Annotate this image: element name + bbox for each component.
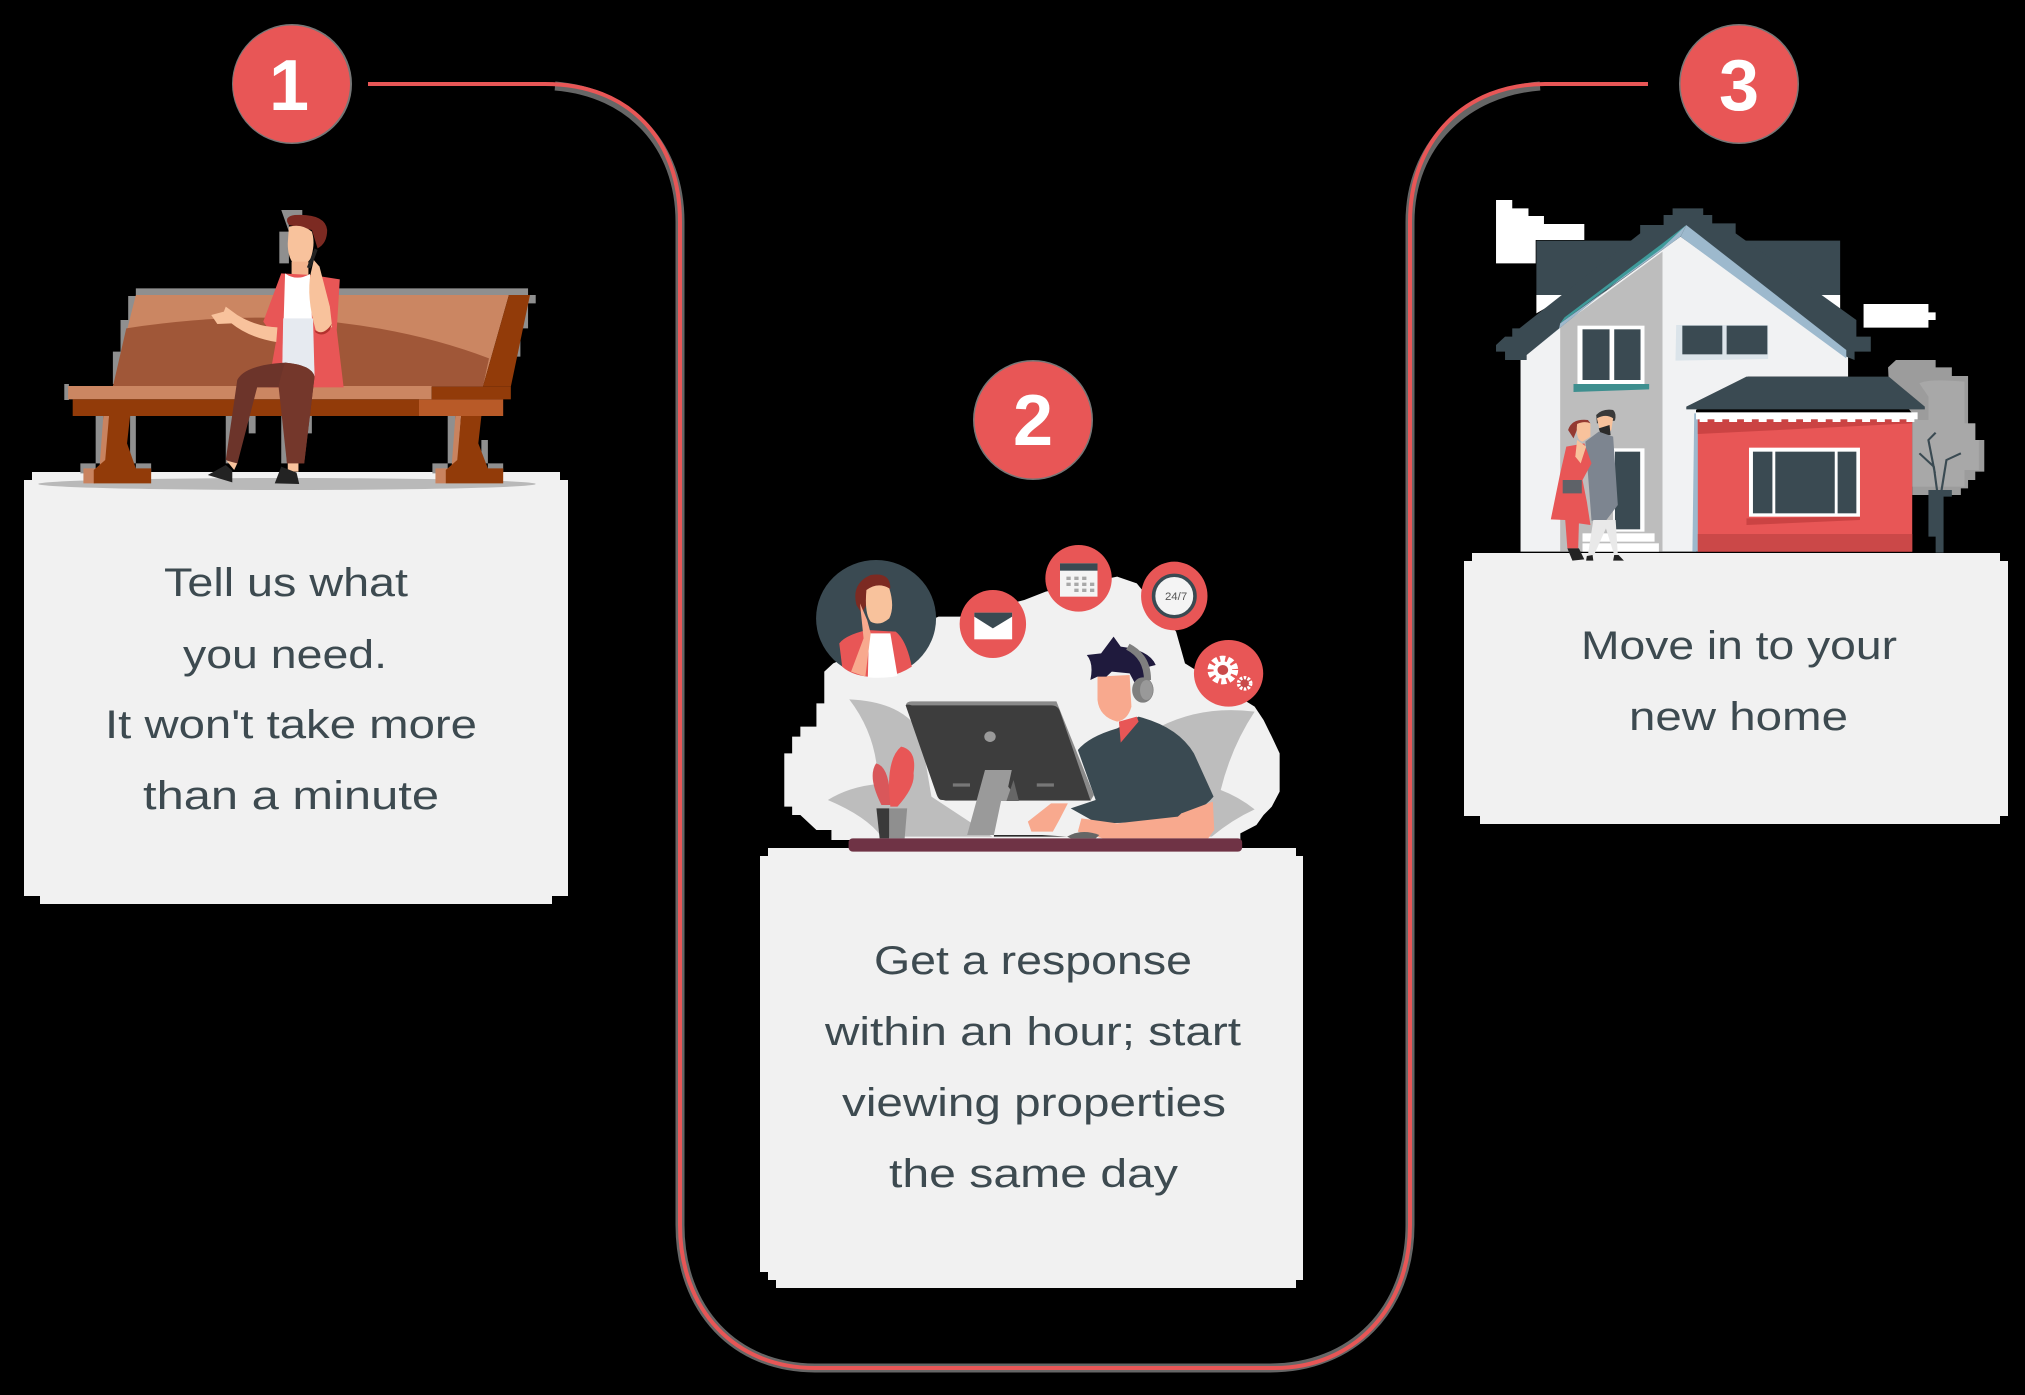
cloud background (784, 577, 1280, 840)
panel: step 3 card (1464, 553, 2008, 824)
step 3 text (1581, 624, 1897, 739)
house walls (1521, 237, 1848, 552)
clouds (1496, 200, 1584, 263)
step 1 number badge (232, 24, 352, 144)
bench legs (83, 416, 109, 483)
main roof (1496, 208, 1871, 360)
leaves background (828, 699, 992, 837)
upper windows (1574, 325, 1768, 392)
bench back (113, 295, 509, 387)
tree trunk (1919, 433, 1961, 553)
door and steps (1583, 448, 1659, 552)
step 2 text (824, 939, 1241, 1196)
step 3 number badge: 3 (1719, 46, 1759, 126)
grey halo behind bench (64, 210, 536, 473)
floor shadow (38, 478, 536, 490)
desk (849, 838, 1242, 852)
step 3 text: Move in to your (1581, 624, 1897, 668)
step 2 text: viewing properties (842, 1081, 1226, 1125)
panel: step 2 card (760, 848, 1303, 1288)
step 2 text: within an hour; start (824, 1010, 1241, 1054)
step 1 text: It won't take more (105, 703, 477, 747)
couple (1551, 410, 1624, 561)
connector line linking steps 1, 2 and 3 (368, 84, 1648, 1368)
step 2 text: Get a response (874, 939, 1192, 983)
plant (873, 747, 914, 838)
step 1 text: Tell us what (164, 561, 408, 605)
back roof (1536, 241, 1840, 295)
icon: 24/7 clock (1141, 562, 1207, 630)
tree foliage (1888, 360, 1984, 495)
portrait bubble (816, 560, 936, 678)
icon: 24/7 clock: 24/7 (1165, 591, 1187, 603)
panel: step 1 card (24, 472, 568, 904)
icon: gears (1194, 640, 1263, 707)
step 3 number badge (1679, 24, 1799, 144)
woman (208, 215, 344, 484)
step 1 text: than a minute (143, 774, 439, 818)
step 1 number badge: 1 (269, 46, 309, 126)
icon: calendar (1045, 545, 1112, 612)
illustration: couple in front of house (1496, 200, 1984, 561)
illustration: agent at computer with contact icons (784, 545, 1280, 852)
step 2 number badge (973, 360, 1093, 480)
icon: email (960, 590, 1026, 658)
annex (1686, 377, 1925, 552)
computer monitor (906, 701, 1094, 837)
step 1 text (105, 561, 477, 818)
step 1 text: you need. (183, 633, 387, 677)
step 2 number badge: 2 (1013, 381, 1053, 461)
man (1028, 637, 1214, 838)
bench seat (68, 386, 432, 399)
illustration: woman on phone sitting on bench (38, 210, 536, 490)
step 2 text: the same day (889, 1152, 1178, 1196)
step 3 text: new home (1629, 695, 1848, 739)
